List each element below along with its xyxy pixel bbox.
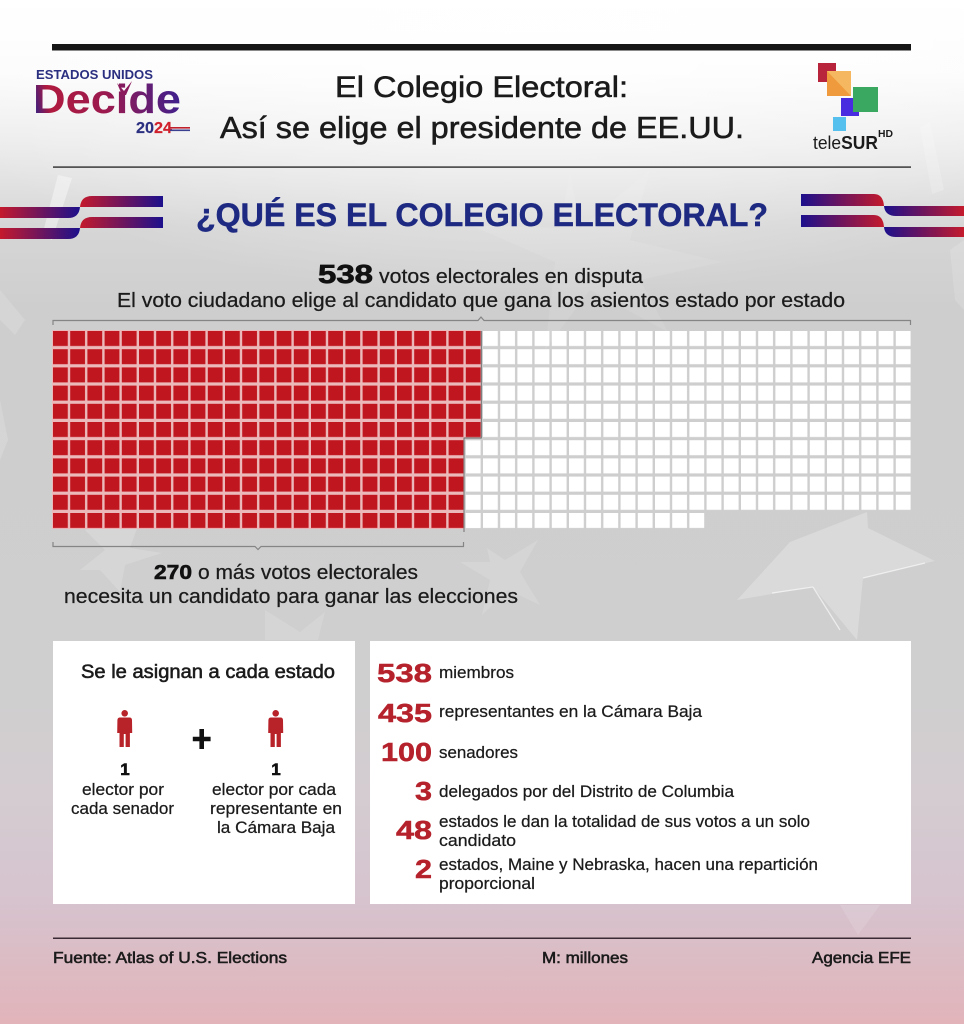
text: 538 votos electorales [117, 259, 845, 312]
text: elector por cada representante: elector por cada [212, 781, 337, 799]
item: 2 estados: 2 [415, 854, 432, 884]
logo: Estados Unidos Decide 2024 [33, 67, 190, 137]
item: 435 representantes: 435 [378, 698, 432, 728]
footer text [53, 950, 911, 967]
item: 100 senadores [381, 737, 518, 767]
panel: asignación por estado [53, 641, 355, 904]
logo: Estados Unidos Decide 2024: ESTADOS UNIDOS [36, 67, 153, 82]
item: 3 delegados: delegados por del Distrito de Columbia [439, 783, 735, 801]
panel: cifras [370, 641, 911, 904]
text: elector por cada senador: elector por [82, 781, 165, 799]
title: Así se elige el presidente de EE.UU. [220, 110, 744, 145]
item: 48 estados: estados le dan la totalidad de sus votos a un solo [439, 813, 810, 831]
text: elector por cada senador [71, 760, 175, 818]
item: 100 senadores: senadores [439, 744, 518, 762]
white squares: remaining votes [464, 331, 911, 528]
item: 3 delegados: 3 [415, 776, 432, 806]
header divider [53, 166, 911, 168]
logo: Estados Unidos Decide 2024: 2024 [136, 120, 172, 137]
item: 48 estados: 48 [396, 815, 432, 845]
item: 538 miembros: 538 [377, 658, 432, 688]
item: 100 senadores: 100 [381, 737, 432, 767]
waffle chart: 538 electoral votes [52, 330, 911, 532]
top rule [52, 44, 911, 50]
text: elector por cada representante: representante en [210, 800, 342, 818]
bracket: 270 votes [53, 542, 464, 550]
text: elector por cada representante: la Cámara Baja [217, 819, 336, 837]
text: 270 votos: necesita un candidato para ganar las elecciones [64, 586, 518, 608]
item: 538 miembros [377, 658, 514, 688]
panel heading: Se le asignan a cada estado [81, 662, 335, 683]
logo: teleSUR HD [813, 63, 893, 153]
text: 270 votos: 270 [154, 562, 192, 584]
logo: Estados Unidos Decide 2024: Decide [33, 76, 181, 122]
text: 270 votos: o más votos electorales [198, 562, 418, 584]
red squares: 270 votes [52, 330, 481, 532]
item: 2 estados: estados, Maine y Nebraska, hacen una repartición [439, 856, 818, 874]
text: elector por cada representante: 1 [271, 760, 281, 779]
logo: teleSUR HD: HD [878, 129, 893, 140]
text: 538 votos electorales: 538 [318, 259, 373, 289]
text: elector por cada senador: cada senador [71, 800, 175, 818]
text: elector por cada senador: 1 [120, 760, 130, 779]
logo: teleSUR HD: teleSUR [813, 133, 878, 153]
title: El Colegio Electoral: [335, 71, 628, 104]
item: 435 representantes: representantes en la Cámara Baja [439, 703, 703, 721]
text: 270 votos [64, 562, 518, 608]
title [220, 71, 744, 145]
bracket: all votes [53, 317, 910, 325]
section heading: ¿QUÉ ES EL COLEGIO ELECTORAL? [196, 197, 768, 233]
footer rule [53, 938, 911, 939]
item: 2 estados: proporcional [439, 875, 535, 893]
footer text: Fuente: Atlas of U.S. Elections [53, 950, 287, 967]
decorative stripes left [0, 196, 163, 239]
item: 2 estados [415, 854, 818, 893]
item: 538 miembros: miembros [439, 664, 514, 682]
text: 538 votos electorales: votos electorales en disputa [379, 266, 644, 288]
item: 48 estados [396, 813, 810, 850]
icon: person representative [268, 710, 283, 747]
icon: person senator [117, 710, 132, 747]
footer text: Agencia EFE [812, 950, 911, 967]
text: 538 votos electorales: El voto ciudadano elige al candidato que gana los asientos estado por estado [117, 290, 845, 312]
item: 435 representantes [378, 698, 703, 728]
icon: plus [193, 729, 211, 749]
item: 48 estados: candidato [439, 832, 516, 850]
text: elector por cada representante [210, 760, 342, 837]
footer text: M: millones [542, 950, 628, 967]
decorative stripes right [801, 194, 964, 237]
item: 3 delegados [415, 776, 735, 806]
